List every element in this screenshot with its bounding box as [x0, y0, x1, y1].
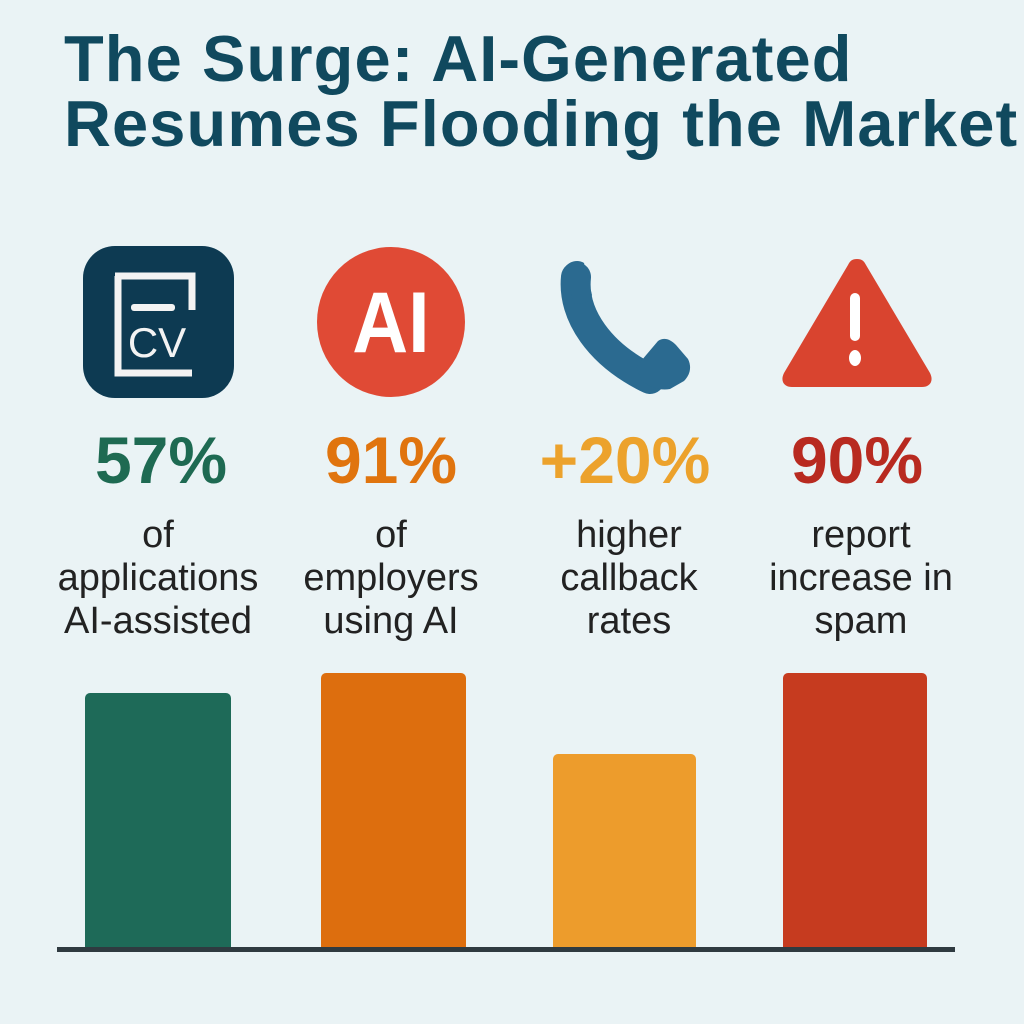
stat 3 label: callback: [560, 557, 698, 599]
stat 3 label: [560, 514, 698, 642]
icon: CV document: CV: [128, 319, 186, 366]
stat 2 label: of: [375, 514, 407, 556]
stat 4 number: 90%: [791, 423, 923, 497]
icon: AI circle: [317, 247, 465, 397]
stat 2 label: employers: [303, 557, 479, 599]
title: Resumes Flooding the Market: [64, 87, 1018, 160]
bar: 57%: [85, 693, 231, 950]
stat 1 label: [58, 514, 258, 642]
stat 1 label: AI-assisted: [64, 600, 252, 642]
stat 3 label: higher: [576, 514, 682, 556]
stat 3 label: rates: [587, 600, 671, 642]
title: [64, 22, 1018, 160]
stat 2 label: [303, 514, 479, 642]
bar: +20%: [553, 754, 696, 950]
icon: AI circle: AI: [352, 275, 430, 371]
icon: CV document: [83, 246, 234, 398]
stat 3 number: +20%: [540, 423, 710, 497]
stat 1 number: 57%: [95, 423, 227, 497]
stat 4 label: [769, 514, 953, 642]
stat 4 label: increase in: [769, 557, 953, 599]
stat 1 label: of: [142, 514, 174, 556]
icon: warning triangle: [782, 259, 932, 387]
stat 2 label: using AI: [323, 600, 459, 642]
stat 4 label: spam: [815, 600, 907, 642]
stat 4 label: report: [811, 514, 911, 556]
title: The Surge: AI-Generated: [64, 22, 853, 95]
stat 2 number: 91%: [325, 423, 457, 497]
icon: phone: [560, 261, 690, 394]
bar: 90%: [783, 673, 927, 950]
stat 1 label: applications: [58, 557, 258, 599]
bar: 91%: [321, 673, 466, 950]
